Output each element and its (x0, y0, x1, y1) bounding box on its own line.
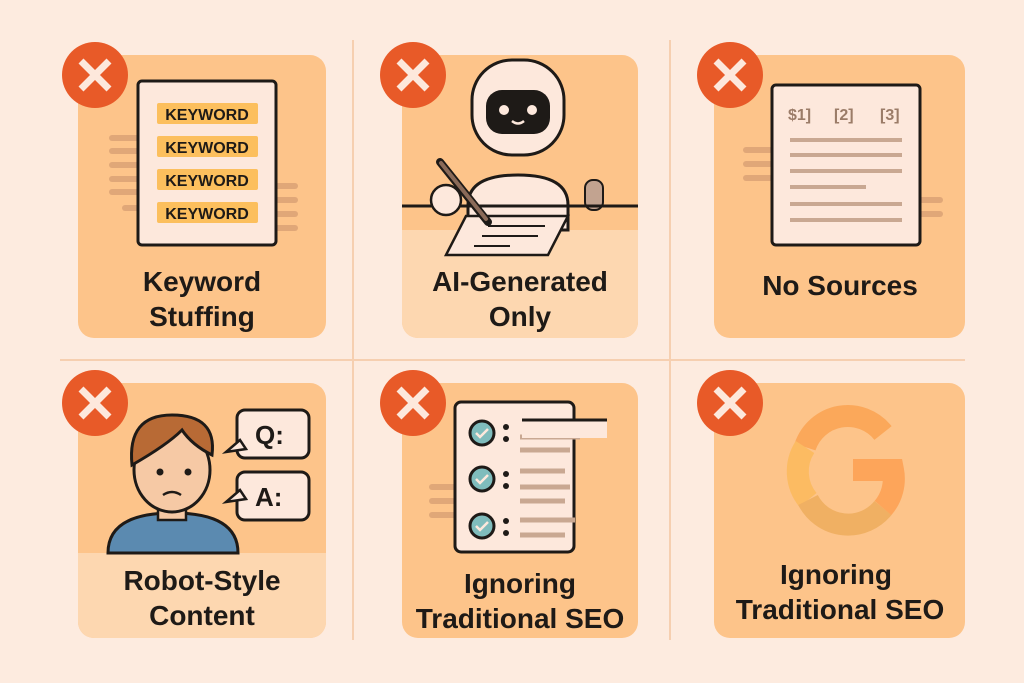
icon: document with keywords: KEYWORD (165, 107, 249, 124)
heading: robot-style content: Content (149, 600, 255, 631)
icon: faded G logo (798, 416, 894, 525)
heading: keyword stuffing: Keyword (143, 266, 261, 297)
heading: AI-generated only: AI-Generated (432, 266, 608, 297)
heading: Ignoring (464, 568, 576, 599)
heading: robot-style content (123, 565, 281, 631)
icon: checklist (432, 402, 607, 552)
icons: red X badges (62, 42, 763, 436)
heading: keyword stuffing: Stuffing (149, 301, 255, 332)
icon: document with citations: [3] (880, 107, 900, 124)
icon: confused person with Q/A bubbles: Q: (255, 420, 284, 450)
icon: document with keywords: KEYWORD (165, 173, 249, 190)
heading: no sources: No Sources (762, 270, 918, 301)
icon: robot writing (402, 60, 638, 255)
panel: robot-style content (78, 383, 326, 638)
heading (736, 559, 944, 625)
panel: keyword stuffing (78, 55, 326, 338)
heading: Ignoring (780, 559, 892, 590)
heading: Traditional SEO (736, 594, 944, 625)
heading: robot-style content: Robot-Style (123, 565, 281, 596)
icon: document with citations: [2] (834, 107, 854, 124)
icon: document with keywords: KEYWORD (165, 206, 249, 223)
heading (416, 568, 624, 634)
panel: ignoring traditional SEO (G logo) (714, 383, 965, 638)
icon: confused person with Q/A bubbles (108, 410, 309, 553)
heading: Traditional SEO (416, 603, 624, 634)
heading: AI-generated only (432, 266, 608, 332)
icon: document with citations: $1] (788, 107, 811, 124)
panel: ignoring traditional SEO (checklist) (402, 383, 638, 638)
icon: document with keywords: KEYWORD (165, 140, 249, 157)
icon: document with keywords (112, 81, 295, 245)
icon: document with citations (746, 85, 940, 245)
heading: AI-generated only: Only (489, 301, 552, 332)
panel: no sources (714, 55, 965, 338)
panel: AI-generated only (402, 55, 638, 338)
heading: keyword stuffing (143, 266, 261, 332)
icon: confused person with Q/A bubbles: A: (255, 482, 282, 512)
